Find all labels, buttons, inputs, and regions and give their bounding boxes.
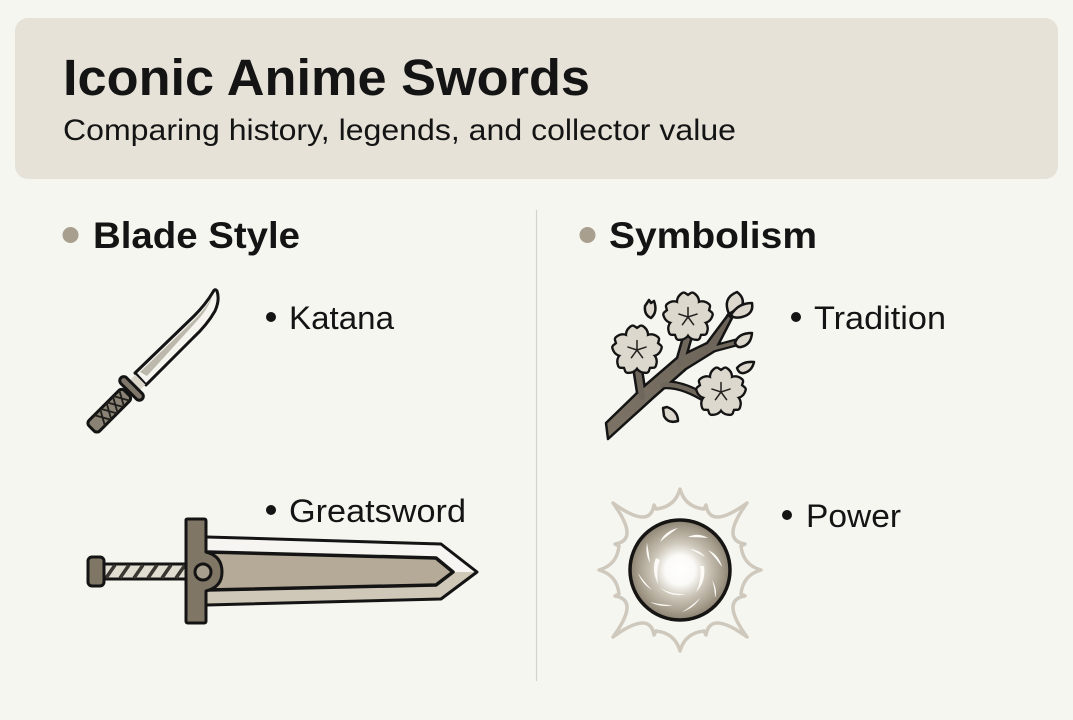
- label: greatsword: Greatsword: [289, 493, 466, 529]
- header banner: [15, 18, 1058, 179]
- column divider: [536, 210, 538, 681]
- panel: symbolism: [580, 215, 946, 651]
- icon: greatsword: [88, 519, 477, 623]
- label: katana: Katana: [289, 300, 394, 336]
- panel: blade style: [62, 215, 477, 623]
- label: power: Power: [806, 498, 901, 534]
- icon: power orb: [599, 489, 761, 651]
- icon: katana: [81, 290, 218, 439]
- buds and loose petals: [645, 292, 754, 422]
- heading: blade style: Blade Style: [93, 215, 300, 256]
- title: Iconic Anime Swords: [63, 49, 590, 106]
- swirl highlights: [638, 528, 722, 612]
- label: tradition: Tradition: [814, 300, 946, 336]
- subtitle: Comparing history, legends, and collector value: [63, 114, 736, 147]
- heading: symbolism: Symbolism: [609, 215, 817, 256]
- icon: cherry blossom branch: [606, 292, 754, 439]
- flowers: [612, 294, 746, 416]
